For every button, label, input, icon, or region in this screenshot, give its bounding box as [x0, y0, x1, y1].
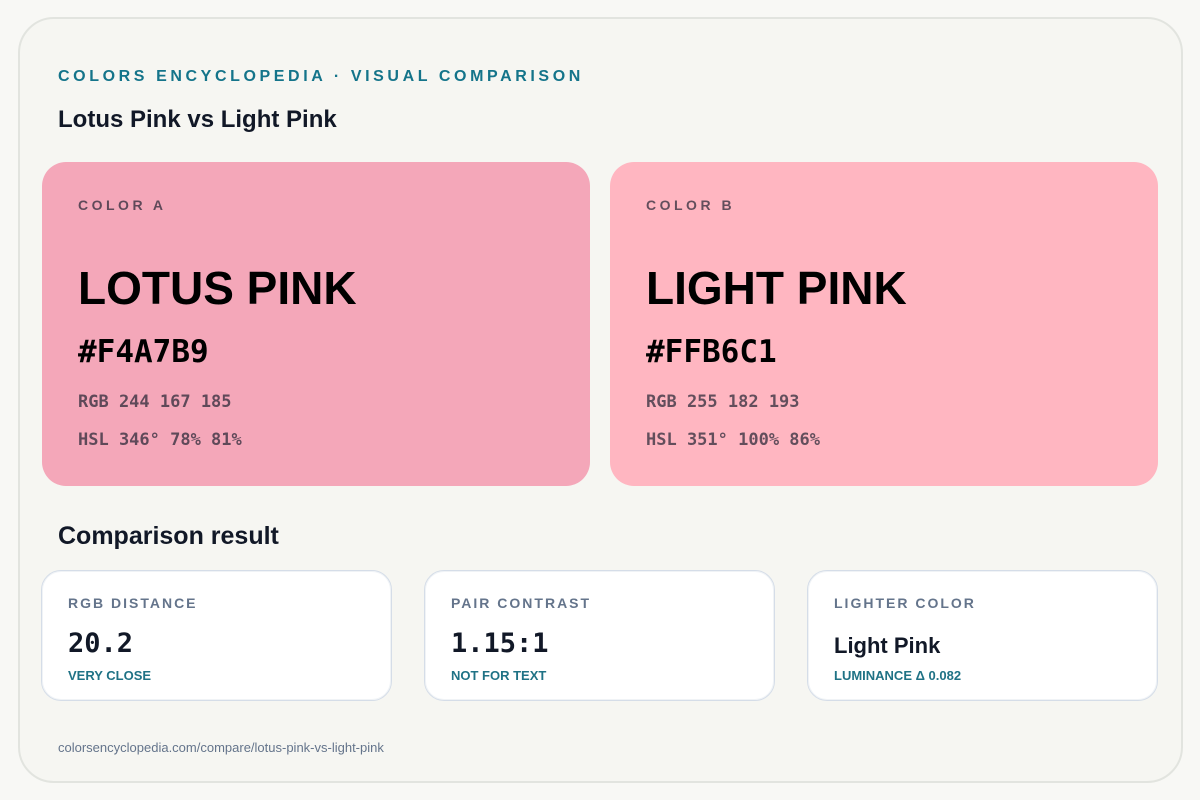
color A HSL: HSL 346° 78% 81%	[78, 430, 242, 450]
eyebrow heading: COLORS ENCYCLOPEDIA · VISUAL COMPARISON	[58, 68, 584, 85]
section heading: Comparison result	[58, 522, 279, 550]
color A hex: #F4A7B9	[78, 334, 209, 370]
color B name: LIGHT PINK	[646, 262, 907, 314]
color B hex: #FFB6C1	[646, 334, 777, 370]
panel: color B	[610, 162, 1158, 486]
color B HSL: HSL 351° 100% 86%	[646, 430, 820, 450]
lighter color name: Light Pink	[834, 633, 940, 658]
color B RGB: RGB 255 182 193	[646, 392, 800, 412]
card: RGB distance	[41, 570, 392, 701]
card: pair contrast	[424, 570, 775, 701]
pair contrast note: NOT FOR TEXT	[451, 668, 546, 683]
RGB distance note: VERY CLOSE	[68, 668, 151, 683]
title: Lotus Pink vs Light Pink	[58, 106, 337, 133]
color A RGB: RGB 244 167 185	[78, 392, 232, 412]
color A label: COLOR A	[78, 197, 167, 213]
color B label: COLOR B	[646, 197, 735, 213]
lighter color label: LIGHTER COLOR	[834, 595, 976, 611]
panel: color A	[42, 162, 590, 486]
pair contrast label: PAIR CONTRAST	[451, 595, 591, 611]
RGB distance label: RGB DISTANCE	[68, 595, 198, 611]
color A name: LOTUS PINK	[78, 262, 357, 314]
footer URL: colorsencyclopedia.com/compare/lotus-pink-vs-light-pink	[58, 740, 384, 755]
card: lighter color	[807, 570, 1158, 701]
luminance note: LUMINANCE Δ 0.082	[834, 668, 961, 683]
pair contrast value: 1.15:1	[451, 628, 549, 659]
RGB distance value: 20.2	[68, 628, 133, 659]
